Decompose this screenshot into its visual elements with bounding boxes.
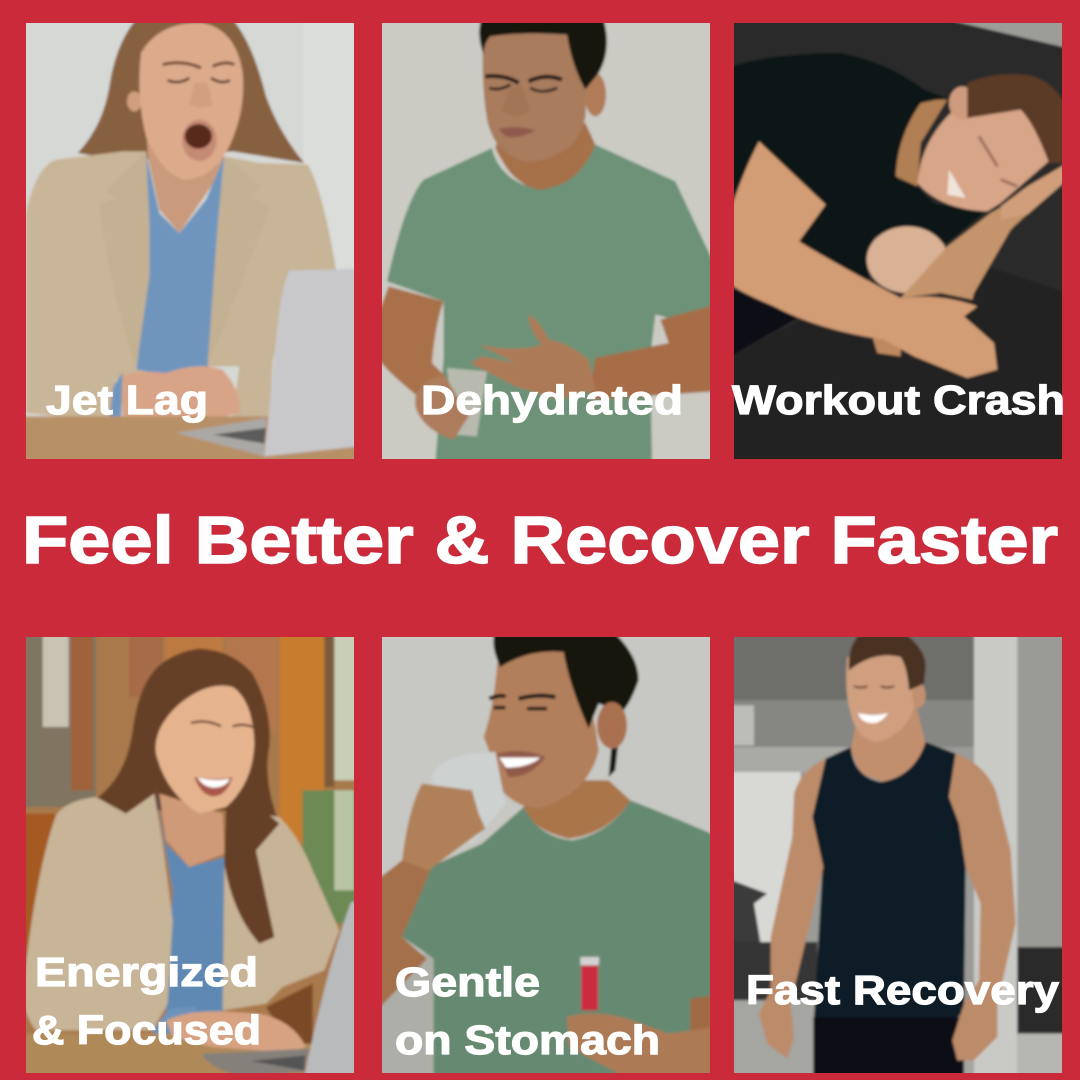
title: Feel Better & Recover Faster (22, 503, 1058, 578)
panel: gentle on stomach (375, 630, 717, 1080)
label: gentle on stomach: on Stomach (395, 1017, 660, 1063)
label: energized and focused: & Focused (32, 1007, 261, 1053)
label: energized and focused (32, 949, 261, 1053)
label: workout crash: Workout Crash (732, 377, 1065, 423)
panel: jet lag (19, 16, 361, 466)
label: gentle on stomach: Gentle (395, 959, 540, 1005)
panel: energized and focused (19, 630, 361, 1080)
label: energized and focused: Energized (35, 949, 258, 995)
label: gentle on stomach (395, 959, 660, 1063)
label: dehydrated: Dehydrated (421, 377, 683, 423)
panel: fast recovery (727, 630, 1069, 1080)
label: jet lag: Jet Lag (46, 377, 208, 423)
panel: workout crash (727, 16, 1069, 466)
label: fast recovery: Fast Recovery (746, 967, 1059, 1013)
panel: dehydrated (375, 16, 717, 466)
